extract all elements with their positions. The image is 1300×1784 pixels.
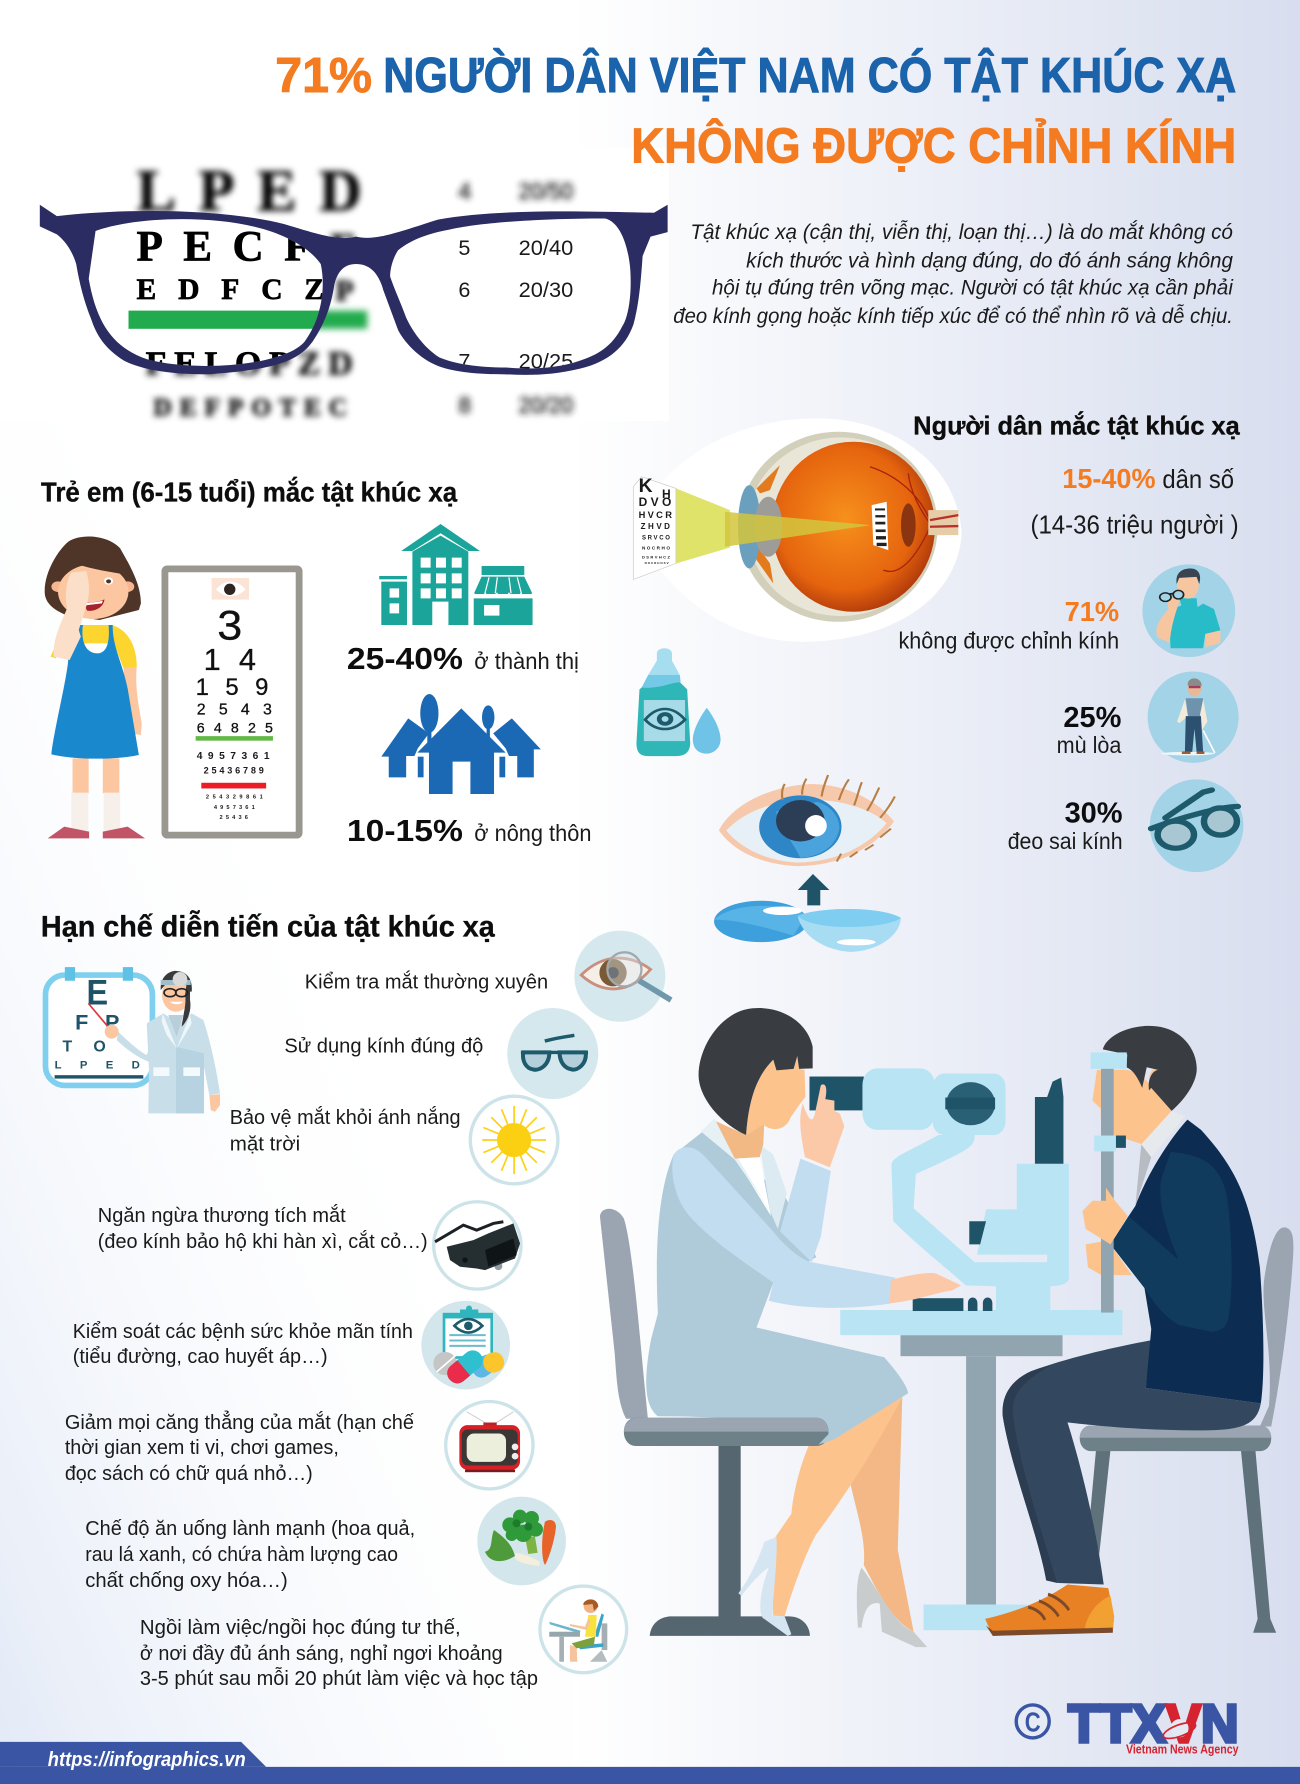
illustration: doctor at eye chart: LPED: [55, 1059, 140, 1071]
stat: population: 15-40%: [1062, 463, 1156, 494]
left chair: [600, 1209, 810, 1636]
glasses over eye chart: DEFPOTEC: [154, 394, 347, 421]
icon: clipboard and pills: [421, 1301, 510, 1390]
stat: urban children: [347, 641, 579, 676]
list item: injury prevention: (đeo kính bảo hộ khi hàn xì, cắt cỏ…): [98, 1230, 428, 1253]
glasses over eye chart: P: [336, 275, 354, 307]
list item: chronic disease: (tiểu đường, cao huyết áp…): [73, 1345, 328, 1368]
eye anatomy illustration: [633, 418, 962, 642]
list item: healthy diet: rau lá xanh, có chứa hàm lượng cao: [85, 1543, 398, 1566]
eye anatomy illustration: NOCRHOSV: [645, 561, 669, 565]
glasses over eye chart: 20/25: [519, 349, 573, 374]
list item: injury prevention: [98, 1202, 521, 1289]
stat: population: [1062, 463, 1234, 494]
stat: rural children: ở nông thôn: [474, 820, 591, 846]
stat: urban children: 25-40%: [347, 641, 463, 676]
icon: man with glasses: [1142, 564, 1235, 657]
icon: rural houses: [381, 694, 541, 794]
list item: eye checks: Kiểm tra mắt thường xuyên: [305, 971, 548, 994]
chin rest: [1091, 1052, 1127, 1313]
illustration: doctor at eye chart: FP: [75, 1010, 119, 1035]
eye test chart: 4957361: [214, 805, 255, 811]
intro paragraph: Tật khúc xạ (cận thị, viễn thị, loạn thị…) là do mắt không có: [690, 219, 1233, 244]
illustration: girl covering one eye: [45, 537, 145, 838]
title line 2: KHÔNG ĐƯỢC CHỈNH KÍNH: [631, 119, 1236, 174]
list item: correct glasses: [284, 1008, 598, 1099]
icon: sun: [470, 1096, 558, 1184]
stat row: 30 percent: đeo sai kính: [1008, 828, 1123, 854]
heading: limit progression: Hạn chế diễn tiến của tật khúc xạ: [41, 909, 495, 943]
list item: eye strain: thời gian xem ti vi, chơi games,: [65, 1436, 339, 1459]
eye test chart: 4957361: [197, 751, 270, 762]
stat row: 30 percent: 30%: [1065, 798, 1123, 830]
woman doctor: [646, 1008, 961, 1647]
list item: posture: ở nơi đầy đủ ánh sáng, nghỉ ngơi khoảng: [140, 1642, 503, 1665]
icon: eye drops: [636, 648, 721, 756]
stat row: 30 percent: [1008, 798, 1123, 854]
list item: chronic disease: Kiểm soát các bệnh sức khỏe mãn tính: [73, 1320, 413, 1343]
list item: healthy diet: [85, 1497, 566, 1592]
list item: sun protection: mặt trời: [230, 1132, 300, 1155]
stat row: 25 percent: 25%: [1063, 702, 1121, 734]
logo: TTXVN: TTXVN: [1068, 1695, 1239, 1754]
eye test chart: 25436789: [204, 766, 264, 776]
stat: urban children: ở thành thị: [474, 648, 579, 674]
glasses over eye chart: EDFCZ: [136, 274, 324, 306]
eye anatomy illustration: DVO: [639, 495, 671, 509]
glasses over eye chart: 20/30: [519, 277, 573, 302]
glasses over eye chart: 20/50: [519, 178, 573, 204]
eye anatomy illustration: HVCR: [639, 510, 672, 520]
list item: eye strain: Giảm mọi căng thẳng của mắt (hạn chế: [65, 1410, 415, 1434]
stat row: 71 percent: [899, 596, 1119, 654]
icon: magnified eye: [574, 931, 671, 1022]
icon: television: [446, 1402, 533, 1489]
list item: eye strain: đọc sách có chữ quá nhỏ…): [65, 1462, 313, 1485]
illustration: doctor at eye chart: TO: [63, 1038, 106, 1055]
glasses over eye chart: 8: [458, 392, 471, 418]
icon: child at desk: [540, 1586, 627, 1673]
stat row: 25 percent: [1057, 702, 1122, 758]
heading: adults: Người dân mắc tật khúc xạ: [913, 411, 1240, 441]
icon: welding goggles: [434, 1202, 521, 1289]
list item: posture: 3-5 phút sau mỗi 20 phút làm việc và học tập: [140, 1667, 538, 1690]
list item: healthy diet: Chế độ ăn uống lành mạnh (hoa quả,: [85, 1517, 415, 1540]
eye test chart: 254329861: [206, 795, 263, 801]
glasses over eye chart: F: [330, 226, 355, 271]
eye test chart: 64825: [197, 721, 273, 737]
stat row: 71 percent: không được chỉnh kính: [899, 628, 1119, 654]
eye test chart: 159: [196, 674, 268, 701]
list item: chronic disease: [73, 1301, 510, 1390]
stat: millions: (14-36 triệu người ): [1030, 510, 1239, 540]
eye anatomy illustration: NOCRHO: [642, 545, 670, 550]
glasses over eye chart: FELOPZD: [146, 345, 353, 382]
icon: eye with contact lens: [714, 775, 901, 952]
woman skirt over seat: [819, 1393, 908, 1444]
seat: left chair: [624, 1418, 829, 1446]
eye anatomy illustration: SRVCO: [642, 535, 670, 541]
stat: population: dân số: [1162, 464, 1234, 494]
intro paragraph: kích thước và hình dạng đúng, do đó ánh sáng không: [746, 247, 1233, 272]
icon: blind man with cane: [1148, 671, 1239, 763]
stat row: 71 percent: 71%: [1065, 596, 1119, 627]
glasses over eye chart: 7: [458, 349, 470, 374]
eye test chart: 25436: [220, 815, 248, 821]
icon: glasses: [507, 1008, 598, 1099]
glasses over eye chart: PECF: [136, 223, 310, 271]
examination table: [840, 1310, 1122, 1630]
list item: sun protection: [230, 1096, 558, 1184]
glasses over eye chart: LPED: [136, 157, 362, 223]
list item: sun protection: Bảo vệ mắt khỏi ánh nắng: [230, 1106, 461, 1129]
list item: posture: Ngồi làm việc/ngồi học đúng tư thế,: [140, 1616, 461, 1639]
logo: TTXVN: Vietnam News Agency: [1126, 1742, 1239, 1756]
man's hand on rest: [1082, 1188, 1128, 1244]
eye test chart: [165, 569, 299, 835]
list item: injury prevention: Ngăn ngừa thương tích mắt: [98, 1204, 346, 1227]
heading: children: Trẻ em (6-15 tuổi) mắc tật khúc xạ: [41, 477, 458, 508]
stat row: 25 percent: mù lòa: [1057, 732, 1122, 758]
eye anatomy illustration: ZHVD: [641, 522, 670, 531]
illustration: doctor at eye chart: E: [86, 974, 108, 1013]
man patient: [985, 1026, 1263, 1636]
stat: rural children: 10-15%: [347, 813, 463, 848]
illustration: doctor at eye chart: [45, 967, 220, 1113]
glasses over eye chart: [40, 157, 668, 421]
list item: eye checks: [305, 931, 671, 1022]
footer bar: [0, 1742, 1300, 1784]
title line 1: 71%: [275, 49, 372, 103]
eye test chart: 3: [217, 601, 242, 648]
icon: vegetables: [477, 1497, 566, 1585]
slit lamp machine: [809, 1068, 1069, 1311]
eye anatomy illustration: K: [639, 476, 653, 497]
eye anatomy illustration: H: [662, 487, 671, 501]
glasses over eye chart: 20/40: [519, 235, 573, 260]
glasses over eye chart: 4: [458, 178, 471, 204]
eye test chart: 14: [204, 642, 256, 677]
glasses over eye chart: FELOPZD: [146, 345, 353, 382]
icon: city buildings: [379, 524, 533, 625]
glasses over eye chart: 5: [458, 235, 470, 260]
eye test chart: 2543: [197, 702, 272, 719]
list item: healthy diet: chất chống oxy hóa…): [85, 1569, 288, 1592]
copyright mark: C: [1025, 1707, 1041, 1738]
eye anatomy illustration: DSRVHCZ: [642, 554, 671, 559]
intro paragraph: [673, 219, 1234, 328]
list item: correct glasses: Sử dụng kính đúng độ: [284, 1034, 483, 1057]
intro paragraph: đeo kính gọng hoặc kính tiếp xúc để có thể nhìn rõ và dễ chịu.: [673, 303, 1233, 328]
right chair: [1080, 1227, 1293, 1633]
illustration: eye examination scene: [600, 1008, 1293, 1647]
intro paragraph: hội tụ đúng trên võng mạc. Người có tật khúc xạ cần phải: [712, 275, 1234, 300]
stat: rural children: [347, 813, 591, 848]
glasses over eye chart: 20/20: [519, 392, 573, 418]
copyright mark: [1016, 1705, 1049, 1738]
glasses over eye chart: 6: [458, 277, 470, 302]
icon: glasses: [1150, 779, 1243, 872]
footer bar: https://infographics.vn: [48, 1748, 246, 1771]
list item: eye strain: [65, 1402, 533, 1489]
list item: posture: [140, 1586, 627, 1690]
